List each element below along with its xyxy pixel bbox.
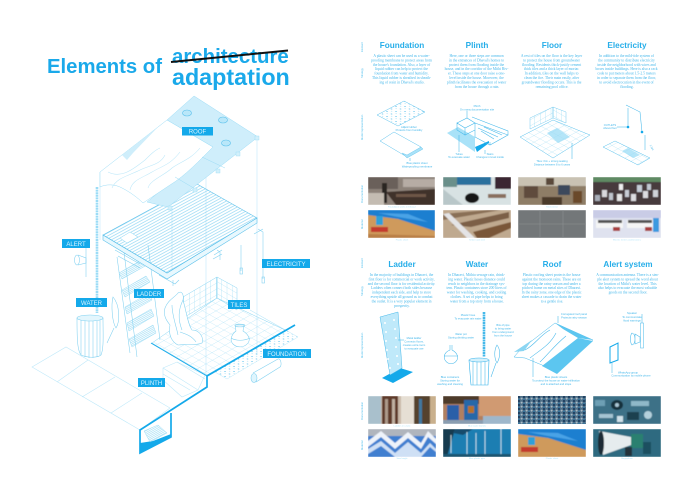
foundation gravel bbox=[215, 310, 298, 379]
photo: documentation bbox=[443, 396, 511, 424]
diagram: foundation layers: Blue plastic sheet bbox=[406, 161, 428, 165]
heading: Ladder bbox=[388, 260, 416, 269]
text block: In the majority of buildings in Dharavi, the bbox=[370, 273, 434, 278]
panel: alert system bbox=[593, 260, 661, 457]
diagram: wiring: OUTLETS bbox=[604, 123, 616, 127]
text block: In addition to the mild-tide system of bbox=[599, 54, 655, 58]
diagram: water storage: washing and cleaning bbox=[437, 382, 463, 386]
foundation roll bbox=[251, 359, 281, 382]
diagram: roof sheet: Corrugated roof panel bbox=[561, 312, 587, 316]
text block: Here, one or three steps are common bbox=[449, 54, 504, 59]
photo: material bbox=[368, 210, 435, 238]
text block: proofing membrane to protect areas from bbox=[371, 58, 432, 62]
photo captions: Timber and steel bbox=[469, 238, 486, 242]
ladder bbox=[117, 245, 160, 357]
text block: water for washing, cooking, and cooling bbox=[447, 291, 506, 296]
diagram: metal ladder: creates extra room bbox=[403, 343, 426, 347]
photo captions: Foundation works in Dharavi bbox=[388, 206, 416, 208]
hose bbox=[107, 297, 119, 343]
plinth section bbox=[140, 425, 171, 453]
diagram: tile floor: Tiles: thin + strong sealing bbox=[536, 159, 568, 163]
clay pot bbox=[231, 324, 250, 347]
deck hatch opening bbox=[120, 232, 138, 243]
rain pipe bbox=[96, 187, 98, 313]
text block: ing water. Plastic hoses distance could bbox=[448, 277, 505, 281]
diagram: metal ladder: to evacuate use bbox=[405, 346, 424, 350]
photo: documentation bbox=[368, 177, 435, 205]
photo: material bbox=[368, 429, 436, 457]
text block: remaining pool office. bbox=[536, 85, 568, 89]
photo: material bbox=[518, 210, 586, 238]
panel: plinth bbox=[443, 41, 511, 238]
photo captions: Ladders in a lane bbox=[394, 424, 411, 428]
photo: material bbox=[518, 429, 586, 457]
diagram: water storage: to bring water bbox=[495, 326, 511, 330]
side labels: top row: Material bbox=[360, 219, 364, 229]
panel: roof bbox=[514, 260, 593, 457]
label: tiles bbox=[228, 300, 250, 309]
ground pavers bbox=[32, 347, 170, 430]
panel: electricity bbox=[593, 41, 661, 238]
diagram: water storage: Storing water for bbox=[440, 378, 460, 382]
photo: material bbox=[443, 429, 511, 457]
text block: in the entrances of Dhaval's homes to bbox=[449, 58, 504, 62]
text block: reach to neighbors in the drainage sys- bbox=[448, 282, 506, 286]
text block: In the rainy zone, one edge of the plastic bbox=[522, 291, 582, 296]
photo captions: Steel angle bbox=[397, 457, 408, 460]
text block: house, and in the corridor of the Mithi Riv- bbox=[445, 67, 509, 72]
text block: first floor is for commercial or work activity, bbox=[368, 277, 435, 282]
label: electricity bbox=[262, 259, 310, 268]
photo captions: Plastic sheet bbox=[546, 457, 559, 460]
diagram: plinth steps: On many documentation site bbox=[460, 108, 495, 112]
label: foundation: FOUNDATION bbox=[267, 352, 307, 358]
diagram: alert devices bbox=[610, 311, 651, 378]
text block: Plastic roofing sheet protects the house bbox=[523, 273, 581, 277]
text block: also helps to evacuate the most valuable bbox=[598, 286, 657, 290]
heading: Plinth bbox=[466, 41, 488, 50]
diagram: plinth steps: To evacuate water bbox=[448, 155, 470, 159]
diagram: foundation layers bbox=[377, 101, 433, 168]
text block: pitched frame on metal sites of Dharavi. bbox=[522, 286, 581, 290]
photo: material bbox=[593, 429, 661, 457]
roof vents bbox=[182, 110, 230, 146]
diagram: water storage: Storing drinking water bbox=[448, 336, 474, 340]
diagram: water storage: from the house bbox=[494, 334, 512, 338]
diagram: water storage: Water pot bbox=[455, 332, 467, 336]
photo captions: Blue plastic pipe bbox=[469, 457, 486, 460]
heading: Electricity bbox=[607, 41, 647, 50]
text block: inside the neighborhood with wires and bbox=[597, 63, 656, 67]
diagram: tile floor bbox=[520, 107, 590, 166]
text block: boxes inside buildings. Here is also a rack bbox=[596, 67, 658, 71]
photo: documentation bbox=[368, 396, 436, 424]
photo: documentation bbox=[593, 396, 661, 424]
text block: water from a top story from a house. bbox=[450, 299, 504, 303]
heading: Roof bbox=[543, 260, 562, 269]
panel: floor bbox=[518, 41, 590, 238]
side labels: top row: Model representation bbox=[360, 114, 364, 140]
photo captions: Blue water barrels bbox=[468, 424, 487, 428]
diagram: foundation layers: Waterproofing membrane bbox=[402, 164, 433, 168]
diagram: water storage: Plastic hose bbox=[461, 313, 476, 317]
diagram: roof sheet: Protects rainy season bbox=[561, 316, 587, 320]
title: adaptation bbox=[172, 64, 290, 90]
text block: the outlet. It is a very popular element in bbox=[372, 299, 432, 303]
text block: This liquid rubber is sheathed in sheath- bbox=[372, 76, 432, 80]
heading: Alert system bbox=[603, 260, 653, 269]
side labels: bottom row: Element bbox=[360, 258, 364, 268]
diagram: alert devices: WhatsApp group bbox=[618, 370, 639, 374]
alert speaker bbox=[74, 248, 86, 277]
label: electricity: ELECTRICITY bbox=[266, 262, 306, 268]
title: Elements of bbox=[47, 56, 162, 78]
text block: code to put meters about 1.5-2.5 meters bbox=[597, 72, 656, 76]
photo: documentation bbox=[593, 177, 661, 205]
water barrel bbox=[77, 315, 103, 358]
panel: water bbox=[437, 260, 514, 457]
text block: and the second floor is for residential activity. bbox=[368, 282, 435, 286]
diagram: water storage: from underground bbox=[492, 330, 514, 334]
deck planks bbox=[103, 184, 257, 273]
diagram: plinth steps: Stairs bbox=[487, 152, 494, 156]
roof cloth bbox=[100, 120, 213, 203]
diagram: alert devices: flood warnings bbox=[623, 318, 641, 322]
diagram: metal ladder bbox=[380, 312, 426, 383]
side labels: top row: Element bbox=[360, 42, 364, 52]
structural posts bbox=[100, 138, 257, 375]
text block: A plastic sheet can be used as a water- bbox=[373, 54, 431, 58]
photo captions: Plastic sheet bbox=[396, 238, 409, 242]
heading: Water bbox=[466, 260, 489, 269]
plinth stairs bbox=[163, 362, 205, 397]
diagram: alert devices: To communicate bbox=[622, 315, 642, 319]
diagram: foundation layers: Liquid rubber bbox=[401, 125, 417, 129]
plinth cut line bbox=[140, 325, 295, 453]
tile back wall bbox=[183, 277, 237, 318]
text block: the house's foundation. Also, a layer of bbox=[373, 63, 431, 68]
label: foundation bbox=[263, 349, 311, 358]
diagram: water storage: To evacuate rain water bbox=[454, 316, 482, 320]
diagram: roof sheet: To protect the house on water-infiltration bbox=[532, 378, 580, 382]
label: plinth bbox=[138, 378, 165, 387]
diagram: metal ladder: Metal ladder bbox=[407, 336, 421, 340]
text block: the location of Mithi's water level. This bbox=[599, 282, 657, 286]
label: roof: ROOF bbox=[189, 130, 206, 136]
label: tiles: TILES bbox=[231, 303, 247, 309]
diagram: wiring bbox=[603, 105, 655, 165]
text block: ple alert system to spread the word about bbox=[597, 277, 658, 281]
label: roof bbox=[182, 127, 213, 136]
steel beams bbox=[115, 229, 263, 286]
text block: to avoid electrocution in the event of bbox=[599, 80, 654, 84]
text block: er. These steps at one door raise a one- bbox=[448, 72, 506, 76]
roof sheet panel bbox=[147, 96, 258, 207]
diagram: plinth steps bbox=[447, 104, 508, 159]
diagram: plinth steps: Changes in level inside bbox=[476, 155, 504, 159]
text block: everything upside all ground as to combat bbox=[371, 295, 432, 299]
text block: flooding. Residents thick-justify cement bbox=[522, 63, 581, 67]
heading: Floor bbox=[542, 41, 563, 50]
text block: protect them from flooding inside the bbox=[449, 63, 504, 67]
title: architecture bbox=[172, 46, 289, 68]
text block: from the house through a rain. bbox=[455, 85, 499, 89]
text block: goods on the second floor. bbox=[609, 291, 647, 295]
deck edge bbox=[103, 218, 257, 279]
text block: independent each side, and help to store bbox=[372, 291, 431, 296]
text block: Ladders often connect both sides because bbox=[371, 286, 432, 290]
diagram: tile floor: Distance between 8 to 6 years bbox=[534, 162, 571, 166]
label: ladder bbox=[134, 289, 164, 298]
text block: clean the fire. Their main easily, after bbox=[524, 76, 580, 81]
side labels: top row bbox=[360, 42, 364, 229]
diagram: foundation layers: Protects from humidity bbox=[396, 128, 423, 132]
text block: liquid rubber can help to protect the bbox=[375, 67, 428, 71]
tile floor bbox=[152, 298, 285, 375]
diagram: plinth steps: Tubes bbox=[455, 152, 463, 156]
label: water bbox=[76, 298, 107, 307]
text block: level inside the house. Moreover, the bbox=[449, 76, 504, 81]
side labels: bottom row: Material bbox=[360, 440, 364, 450]
text block: in order to separate them from the floor, bbox=[597, 76, 656, 81]
diagram: roof sheet: Blue plastic sheets bbox=[545, 375, 568, 379]
text block: prosperity. bbox=[394, 304, 410, 308]
text block: tem. Plastic containers store 200 liters of bbox=[446, 286, 507, 290]
side labels: bottom row: Documentation bbox=[360, 401, 364, 420]
diagram: roof sheet: and is attached and slope bbox=[541, 382, 572, 386]
heading: Foundation bbox=[380, 41, 424, 50]
photo: material bbox=[593, 210, 661, 238]
label: ladder: LADDER bbox=[137, 292, 162, 298]
text block: plinth facilitates the evacuation of water bbox=[447, 80, 507, 84]
diagram: wiring: 1.5m bbox=[649, 144, 655, 152]
roof bolts bbox=[168, 136, 259, 210]
text block: A communication antenna. There is a sim- bbox=[596, 273, 660, 277]
text block: ing of resin in Dhaval's studio. bbox=[379, 80, 425, 84]
diagram: plinth steps: Plinth bbox=[474, 104, 481, 108]
text block: clothes. A set of pipe helps to bring bbox=[451, 295, 503, 299]
axonometric house diagram bbox=[32, 96, 311, 453]
text block: against the monsoon rains. These are on bbox=[522, 277, 581, 281]
diagram: metal ladder: Connects floors, bbox=[404, 340, 424, 344]
diagram: alert devices: Speaker bbox=[627, 311, 637, 315]
text block: A rest of tiles on the floor is the key layer bbox=[521, 54, 583, 58]
panel: foundation bbox=[368, 41, 435, 238]
text block: to a gentle rise. bbox=[541, 299, 563, 303]
photo captions: Electric meters and breakers bbox=[613, 238, 642, 242]
side labels: bottom row bbox=[360, 258, 364, 450]
photo captions: Tiled interior bbox=[546, 206, 558, 208]
diagram: water storage bbox=[437, 312, 514, 386]
diagram: water storage: Bits of pipe bbox=[496, 323, 510, 327]
text block: groundwater flooding occurs. This is the bbox=[522, 80, 582, 84]
photo captions: Megaphone bbox=[621, 458, 634, 460]
title bbox=[47, 46, 290, 90]
diagram: water storage: Blue containers bbox=[441, 375, 460, 379]
side labels: bottom row: Model representation bbox=[360, 332, 364, 358]
text block: sheet makes a cascade to drain the water bbox=[522, 295, 582, 299]
photo: documentation bbox=[518, 396, 586, 424]
panel: ladder bbox=[368, 260, 436, 457]
side labels: bottom row: Strategy bbox=[360, 285, 364, 296]
side labels: top row: Strategy bbox=[360, 67, 364, 78]
side labels: top row: Documentation bbox=[360, 184, 364, 203]
label: alert bbox=[62, 239, 90, 248]
diagram: roof sheet bbox=[514, 312, 593, 386]
text block: In addition, tiles on the wall helps to bbox=[525, 72, 579, 77]
text block: foundation from water and humidity. bbox=[374, 72, 429, 76]
label: alert: ALERT bbox=[66, 242, 86, 248]
photo: documentation bbox=[518, 177, 586, 205]
text block: top during the rainy season and under a bbox=[523, 282, 581, 286]
text block: the community to distribute electricity bbox=[598, 58, 655, 62]
text block: thick tiles and a thick layer of mortar. bbox=[524, 67, 579, 71]
text block: flooding. bbox=[620, 85, 634, 89]
electric wires bbox=[240, 238, 264, 283]
diagram: wiring: Above floor bbox=[603, 126, 617, 130]
photo: documentation bbox=[443, 177, 511, 205]
photo captions bbox=[388, 206, 642, 460]
photo: material bbox=[443, 210, 511, 238]
figure washing bbox=[164, 292, 203, 345]
diagram: alert devices: Communication by mobile phone bbox=[611, 374, 651, 378]
text block: to protect the house from groundwater bbox=[523, 58, 581, 62]
text block: In Dharavi, Mithia sewage rain, drink- bbox=[448, 273, 506, 278]
roof seams bbox=[175, 157, 225, 190]
label: water: WATER bbox=[81, 301, 103, 307]
label: plinth: PLINTH bbox=[141, 381, 162, 387]
